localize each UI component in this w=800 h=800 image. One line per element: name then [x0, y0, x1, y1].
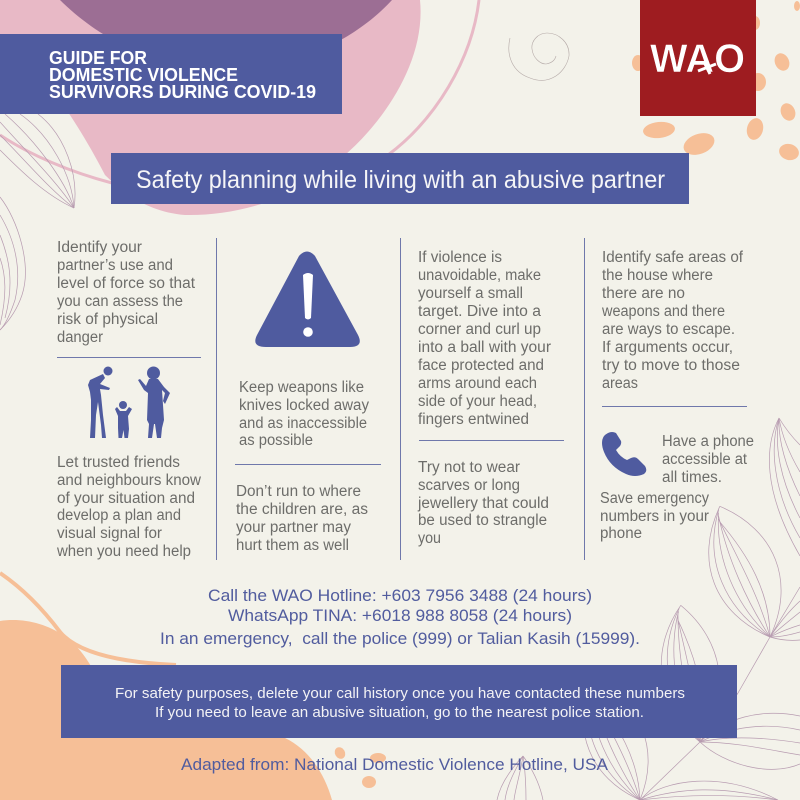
column 4: numbers in your: [600, 508, 709, 525]
column 1: Let trusted friends: [57, 454, 180, 471]
source credit: Adapted from: National Domestic Violence Hotline, USA: [181, 755, 609, 774]
column 4: Have a phone: [662, 433, 754, 450]
column 4: try to move to those: [602, 357, 740, 374]
column 2: Don’t run to where: [236, 483, 361, 500]
blob: purple top: [60, 0, 392, 70]
column 1: level of force so that: [57, 275, 196, 292]
peach dots: [333, 1, 800, 788]
safety notice: For safety purposes, delete your call history once you have contacted these numbers: [115, 686, 685, 702]
column 4: phone: [600, 525, 642, 542]
column 2: your partner may: [236, 519, 351, 536]
column 3: If violence is: [418, 249, 502, 266]
column 2: knives locked away: [239, 397, 369, 414]
column 3: [417, 249, 564, 547]
title banner: [111, 153, 689, 204]
header banner: GUIDE FOR: [49, 48, 147, 68]
column 1: Identify your: [57, 239, 142, 256]
safety notice: If you need to leave an abusive situation, go to the nearest police station.: [155, 705, 644, 721]
header banner: DOMESTIC VIOLENCE: [49, 65, 238, 85]
spiral: [509, 33, 569, 80]
column 4: accessible at: [662, 451, 748, 468]
column 1: of your situation and: [57, 490, 195, 507]
column 4: areas: [602, 375, 638, 392]
icon: warning triangle: [255, 252, 360, 347]
column 3: scarves or long: [418, 477, 520, 494]
column 3: unavoidable, make: [418, 267, 541, 284]
logo: WAO: [640, 0, 756, 116]
column 4: the house where: [602, 267, 713, 284]
curve: peach swoosh: [0, 573, 176, 665]
column 3: fingers entwined: [418, 411, 529, 428]
column 4: Identify safe areas of: [602, 249, 744, 266]
column 3: yourself a small: [418, 285, 523, 302]
column 3: target. Dive into a: [418, 303, 541, 320]
column 4: Save emergency: [600, 490, 709, 507]
column 3: face protected and: [418, 357, 544, 374]
column 3: jewellery that could: [417, 495, 549, 512]
column 3: be used to strangle: [418, 512, 547, 529]
column 3: arms around each: [418, 375, 537, 392]
contact details: In an emergency, call the police (999) or Talian Kasih (15999).: [160, 629, 640, 648]
blob: pink top: [0, 0, 421, 215]
logo: WAO: WAO: [650, 37, 745, 81]
column 1: risk of physical: [57, 311, 158, 328]
column 1: you can assess the: [57, 293, 183, 310]
header banner: SURVIVORS DURING COVID-19: [49, 82, 316, 102]
column 4: there are no: [602, 285, 685, 302]
column 1: danger: [57, 329, 103, 346]
column 4: all times.: [662, 469, 722, 486]
contact details: WhatsApp TINA: +6018 988 8058 (24 hours): [228, 606, 572, 625]
column 1: and neighbours know: [57, 472, 202, 489]
column 3: Try not to wear: [418, 459, 520, 476]
column 2: hurt them as well: [236, 537, 349, 554]
column 2: [235, 379, 381, 554]
column 1: visual signal for: [57, 525, 162, 542]
title banner: Safety planning while living with an abusive partner: [136, 166, 665, 194]
column 1: when you need help: [56, 543, 191, 560]
safety notice: [61, 665, 737, 738]
column 4: are ways to escape.: [602, 321, 735, 338]
header banner: [0, 34, 342, 114]
column 2: as possible: [239, 432, 313, 449]
column 4: If arguments occur,: [602, 339, 733, 356]
column 2: and as inaccessible: [239, 415, 367, 432]
contact details: Call the WAO Hotline: +603 7956 3488 (24 hours): [208, 586, 592, 605]
contact details: [160, 586, 640, 648]
column 3: corner and curl up: [418, 321, 541, 338]
column 1: [56, 239, 202, 560]
blob: peach bottom: [0, 620, 332, 800]
column 2: the children are, as: [236, 501, 368, 518]
column 3: side of your head,: [418, 393, 537, 410]
curve: pink arc: [0, 0, 479, 183]
icon: phone: [602, 432, 646, 476]
column 1: develop a plan and: [57, 507, 181, 524]
icon: arguing family: [88, 366, 170, 438]
column 3: into a ball with your: [418, 339, 551, 356]
column 4: weapons and there: [601, 303, 725, 320]
column 3: you: [418, 530, 441, 547]
column separators: [216, 238, 584, 560]
column 1: partner’s use and: [57, 257, 173, 274]
column 2: Keep weapons like: [239, 379, 364, 396]
column 4: [600, 249, 754, 542]
